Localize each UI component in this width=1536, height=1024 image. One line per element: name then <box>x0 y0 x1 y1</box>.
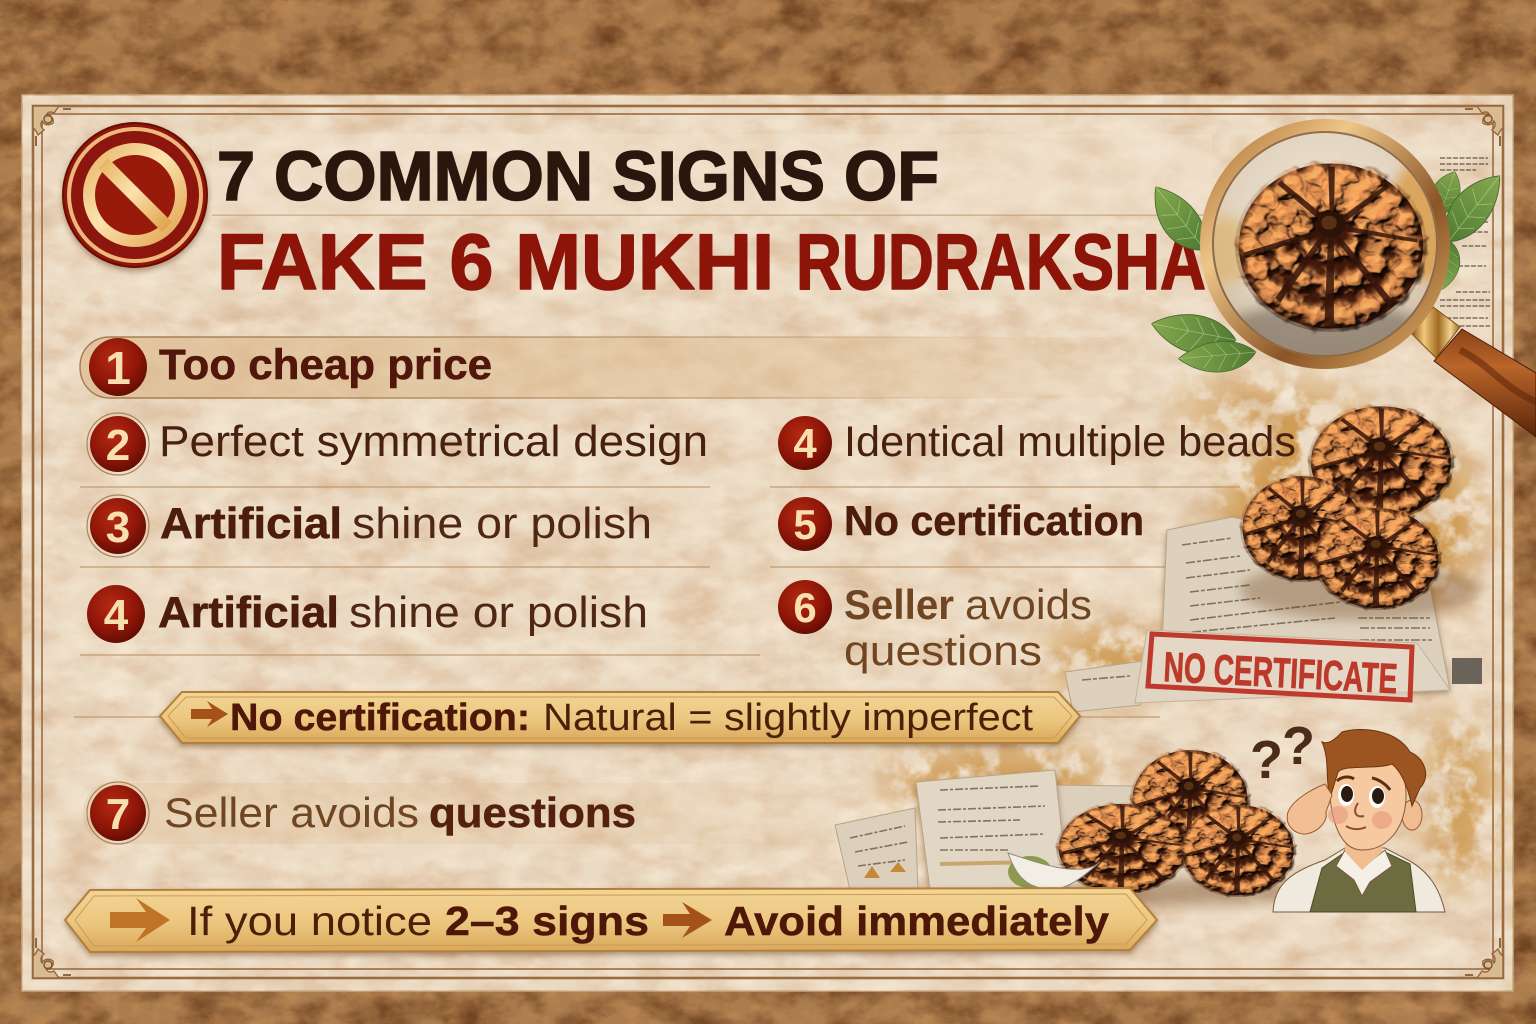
banner: avoid immediately: 2–3 signs <box>445 898 649 944</box>
illustration: bottom certificates <box>835 770 1135 890</box>
right column row 6: seller avoids questions: questions <box>844 627 1042 674</box>
title line 2: FAKE 6 MUKHI <box>217 217 774 306</box>
collar and tie <box>1336 850 1392 896</box>
leaves behind magnifier <box>1140 163 1513 376</box>
icon: arrow <box>191 701 228 727</box>
row 1: too cheap price <box>80 337 1180 398</box>
row 1: too cheap price: 1 <box>105 342 131 394</box>
bead front <box>1311 504 1443 612</box>
title line 2: RUDRAKSHA <box>796 217 1206 306</box>
icon: prohibition sign <box>63 123 207 267</box>
right column row 4: identical multiple beads: 4 <box>793 420 817 467</box>
divider lines <box>74 215 1240 717</box>
left bead <box>1054 800 1190 896</box>
scribbles <box>850 786 1045 866</box>
face <box>1329 752 1406 850</box>
vest <box>1310 852 1416 912</box>
question marks: ? <box>1250 730 1283 790</box>
hand <box>1287 784 1332 834</box>
white leaf with seed <box>1008 853 1100 890</box>
right column row 4: identical multiple beads: Identical multiple beads <box>844 418 1296 466</box>
illustration: confused man <box>1273 729 1445 912</box>
shirt <box>1273 848 1445 912</box>
banner: avoid immediately: Avoid immediately <box>724 898 1109 944</box>
banner: natural = slightly imperfect <box>160 692 1080 743</box>
brows <box>1337 777 1390 790</box>
beads cluster <box>1238 402 1480 620</box>
title line 2 <box>217 217 1206 306</box>
bead in lens <box>1232 157 1430 335</box>
row 3: artificial shine or polish: 3 <box>106 503 130 552</box>
no certificate stamp <box>1135 630 1450 703</box>
question marks <box>1250 716 1315 790</box>
icon: arrow 2 <box>663 902 712 938</box>
bead left <box>1238 472 1366 584</box>
title band <box>212 134 1212 215</box>
row 4: artificial shine or polish <box>87 585 648 643</box>
right column row 6: seller avoids questions: 6 <box>793 584 817 631</box>
banner: avoid immediately <box>65 888 1157 952</box>
right column row 6: seller avoids questions: Seller <box>844 581 954 628</box>
ear <box>1402 800 1422 830</box>
neck <box>1345 835 1382 870</box>
magnifier handle <box>1412 307 1536 437</box>
banner: natural = slightly imperfect: No certification: <box>230 697 530 739</box>
row 1: too cheap price: Too cheap price <box>159 341 492 389</box>
illustration: certificates and stamp <box>1065 517 1482 712</box>
row 3: artificial shine or polish <box>87 495 652 557</box>
right column row 6: seller avoids questions: avoids <box>965 581 1092 628</box>
nose and mouth <box>1346 803 1366 829</box>
row 2: perfect symmetrical design: Perfect symmetrical design <box>159 417 708 466</box>
bead top <box>1306 402 1456 522</box>
row 7: seller avoids questions <box>83 782 880 844</box>
banner: avoid immediately: If you notice <box>187 898 432 944</box>
row 7: seller avoids questions: questions <box>429 789 636 836</box>
row 7: seller avoids questions: 7 <box>106 790 130 839</box>
row 3: artificial shine or polish: shine or polish <box>352 499 652 548</box>
title <box>217 137 1206 306</box>
right column row 5: no certification: 5 <box>793 501 817 548</box>
eyes <box>1338 784 1385 808</box>
row 2: perfect symmetrical design <box>87 413 708 475</box>
right column row 5: no certification: No certification <box>844 497 1144 544</box>
gold dust behind bead cluster <box>880 390 1490 890</box>
row 7: seller avoids questions: Seller avoids <box>164 789 419 836</box>
title line 1: 7 COMMON SIGNS OF <box>217 137 939 215</box>
question marks: ? <box>1282 716 1315 776</box>
row 2: perfect symmetrical design: 2 <box>106 421 130 470</box>
certificate scribbles <box>1082 538 1432 680</box>
icon: arrow 1 <box>110 898 170 942</box>
icon: magnifying glass with bead <box>1199 125 1536 437</box>
row 3: artificial shine or polish: Artificial <box>160 499 342 548</box>
right column row 6: seller avoids questions <box>778 580 1092 674</box>
back bead <box>1128 746 1252 854</box>
no certificate stamp: NO CERTIFICATE <box>1163 643 1399 702</box>
black seal <box>1452 658 1482 684</box>
hair <box>1322 729 1426 806</box>
right bead <box>1178 801 1298 899</box>
banner: natural = slightly imperfect: Natural = slightly imperfect <box>543 697 1033 739</box>
beads group bottom <box>1054 746 1300 906</box>
cheeks <box>1328 806 1348 824</box>
newspaper clippings behind the lens <box>1440 158 1490 326</box>
row 4: artificial shine or polish: shine or polish <box>349 588 648 637</box>
row 4: artificial shine or polish: 4 <box>104 591 129 640</box>
row 4: artificial shine or polish: Artificial <box>158 588 339 637</box>
